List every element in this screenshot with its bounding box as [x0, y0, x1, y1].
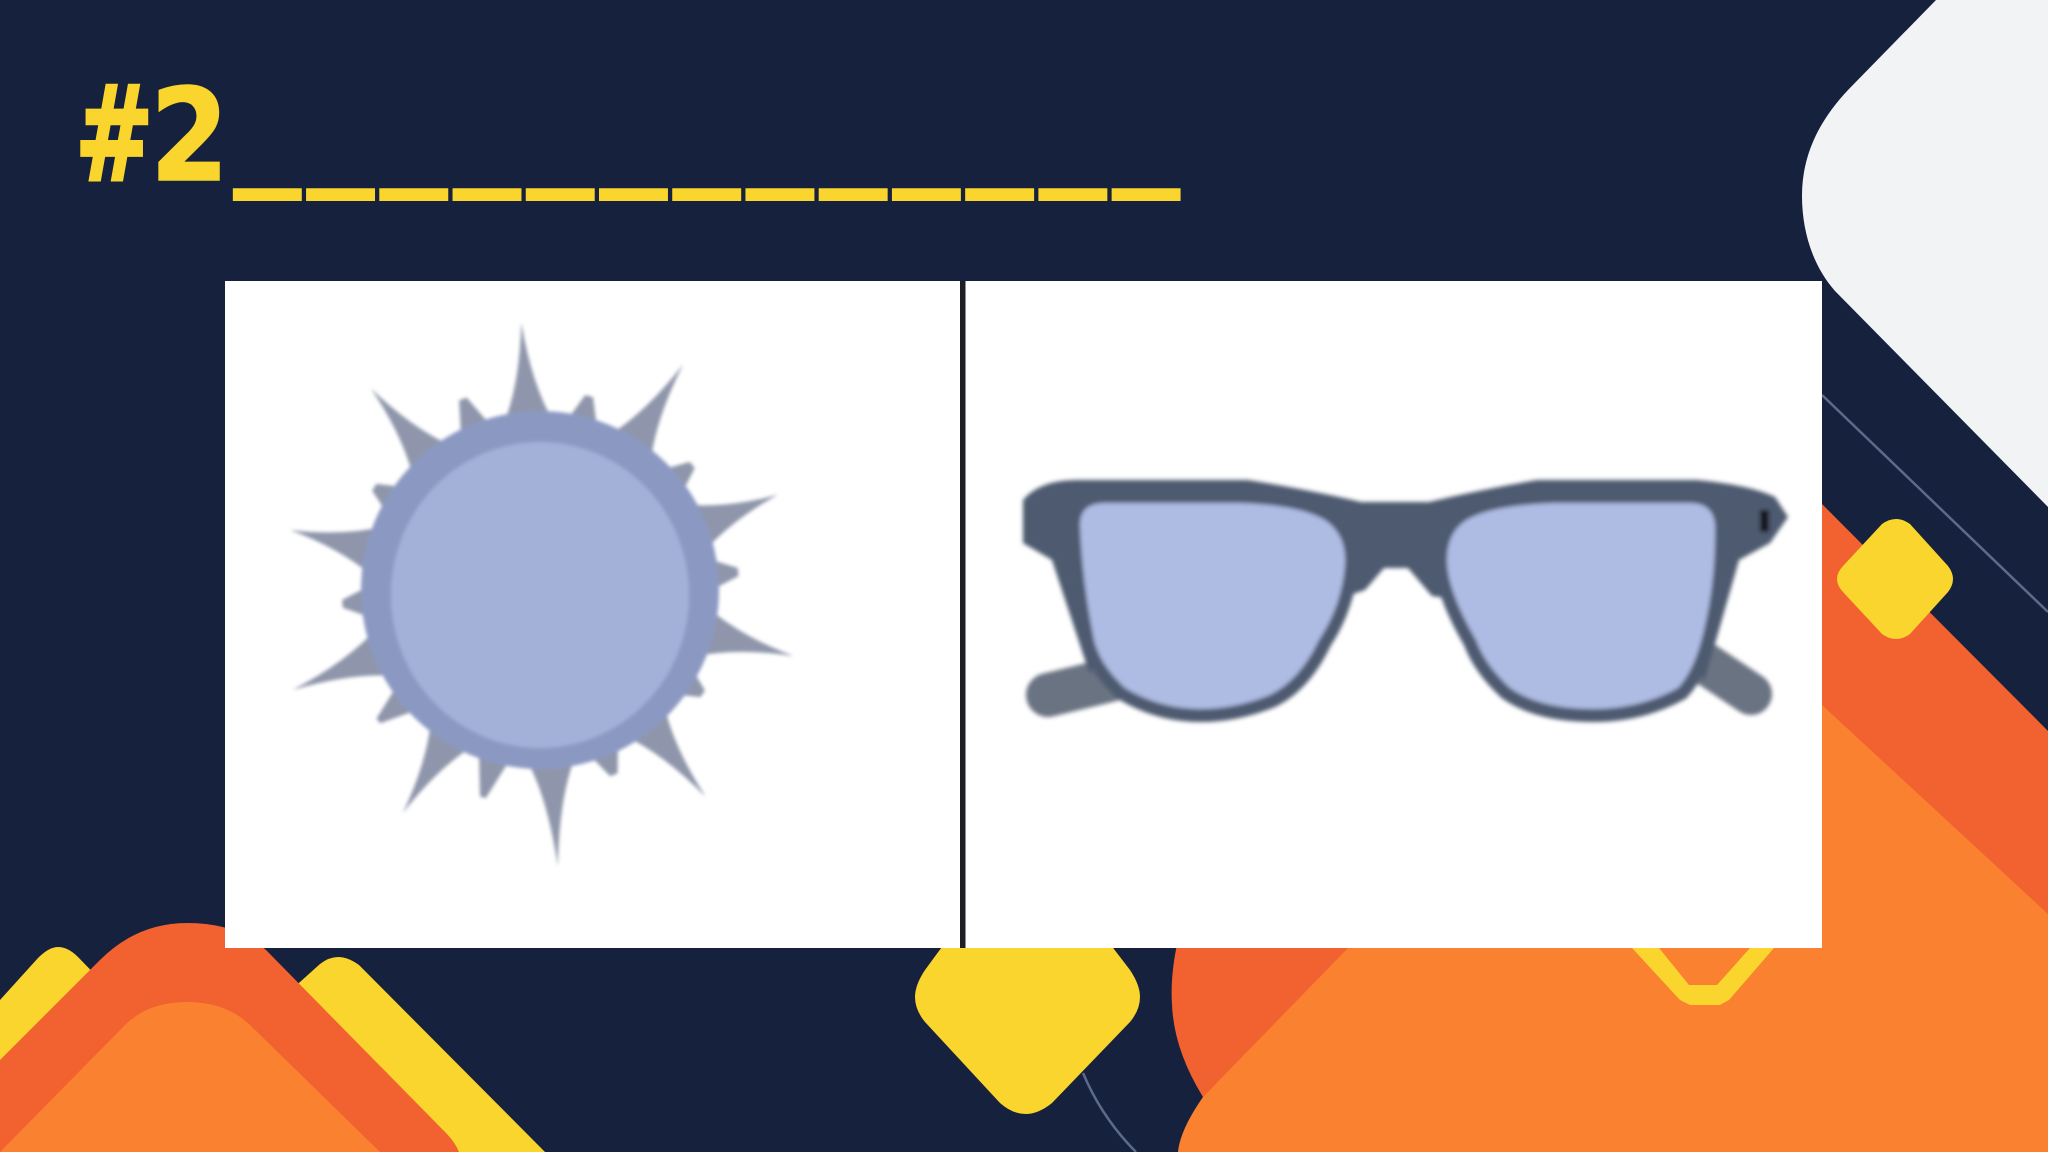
thin line bottom centre — [1083, 1073, 1136, 1152]
thin line right — [1822, 395, 2048, 612]
frame top band — [1023, 480, 1788, 682]
orange large shape — [1178, 640, 2048, 1152]
long sun rays — [283, 321, 800, 868]
title — [75, 0, 1186, 232]
yellow diamond right — [1837, 519, 1953, 639]
yellow peak left — [0, 947, 110, 1100]
left lens — [1080, 503, 1345, 709]
title number: 2 — [150, 61, 229, 211]
yellow outline diamond — [1632, 948, 1774, 1005]
vertical divider — [960, 281, 966, 948]
red-orange blob behind panel — [1172, 940, 1450, 1097]
decorative light rounded shape top right — [1802, 0, 2048, 507]
icon: sunglasses — [1023, 480, 1788, 709]
white image panel — [225, 281, 1822, 948]
red peak — [0, 923, 459, 1152]
icon: sun — [283, 321, 800, 868]
right temple — [1700, 660, 1751, 694]
left temple — [1048, 680, 1110, 695]
mountains bottom left — [0, 923, 545, 1152]
sun inner disc — [391, 442, 689, 748]
yellow diamond bottom centre — [915, 940, 1140, 1114]
red-orange band right — [1700, 400, 2048, 1000]
orange peak — [0, 1002, 380, 1152]
title hash: # — [75, 58, 154, 211]
yellow peak right — [280, 957, 545, 1152]
sun outer disc — [361, 411, 719, 769]
right lens — [1447, 503, 1715, 709]
hinge — [1760, 510, 1769, 532]
